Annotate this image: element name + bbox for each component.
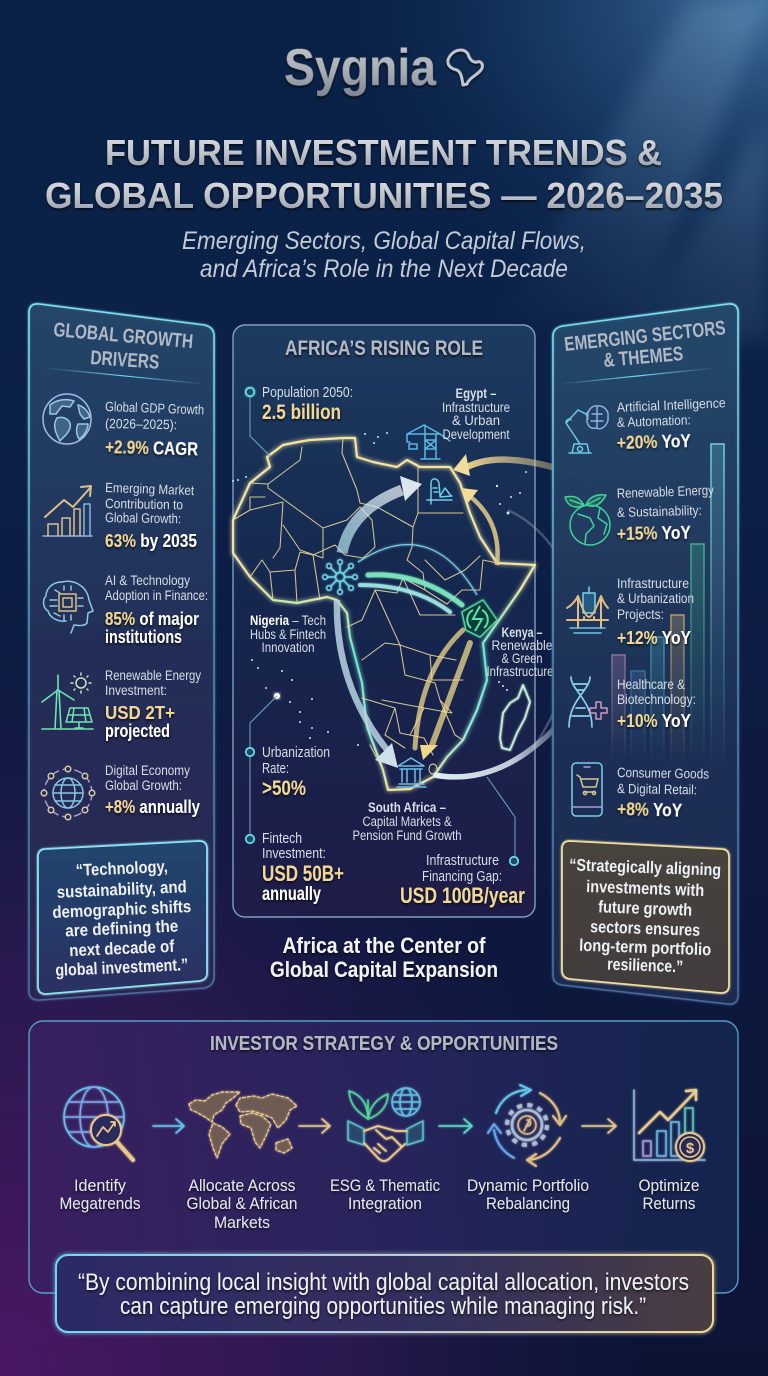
item: renewable energy: Renewable Energy (105, 668, 201, 683)
icon: growth chart with dollar coin: $ (686, 1140, 695, 1157)
step: dynamic rebalancing: Rebalancing (486, 1195, 570, 1213)
icon: kenya green energy (462, 600, 497, 637)
madagascar (500, 685, 530, 750)
item: consumer goods: & Digital Retail: (617, 781, 697, 797)
item: global gdp growth (105, 399, 204, 459)
callout: urbanization and fintech: Urbanization (262, 744, 330, 761)
callout: infrastructure financing gap: USD 100B/year (400, 883, 525, 908)
arrow 3 (439, 1119, 472, 1133)
step: esg integration (330, 1177, 440, 1213)
label: south africa: Capital Markets & (362, 814, 452, 829)
item: artificial intelligence: +20% YoY (617, 431, 691, 453)
item: emerging markets: Contribution to (105, 496, 183, 512)
callout: strategic quote: sectors ensures (590, 917, 700, 940)
heading: africa at the center: Global Capital Expansion (270, 957, 498, 982)
heading: global growth drivers (53, 319, 194, 374)
stars (232, 432, 527, 746)
icon: Africa outline logo (448, 50, 482, 85)
icon: suspension bridge and city (567, 587, 608, 633)
callout: closing quote (56, 1255, 713, 1332)
icon: phone with shopping cart (572, 763, 602, 816)
item: digital economy (105, 763, 200, 817)
icon: dna and medical cross (569, 677, 607, 727)
arrow: nigeria to egypt (342, 476, 422, 553)
item: renewable energy: Investment: (105, 683, 167, 698)
lesotho (429, 764, 437, 774)
step: allocate across markets (186, 1177, 298, 1232)
step: allocate across markets: Markets (214, 1214, 270, 1232)
item: artificial intelligence (616, 395, 726, 453)
step: identify megatrends: Megatrends (60, 1195, 140, 1213)
item: artificial intelligence: Artificial Intelligence (616, 395, 726, 415)
item: artificial intelligence: & Automation: (617, 412, 691, 430)
item: emerging markets: 63% by 2035 (105, 531, 197, 551)
label: nigeria (250, 613, 326, 655)
label: kenya (486, 625, 554, 679)
callout: strategic quote: investments with (586, 877, 704, 900)
panel: global growth drivers (29, 304, 214, 1000)
icon: nigeria tech hub (323, 560, 357, 594)
callout: urbanization and fintech: Fintech (262, 830, 302, 847)
step: esg integration: Integration (348, 1195, 422, 1213)
item: renewable energy: USD 2T+ (105, 703, 175, 723)
step: identify megatrends: Identify (74, 1177, 127, 1195)
item: infrastructure and urbanization: & Urbanization (617, 591, 694, 606)
callout: technology quote: “Technology, (75, 857, 168, 880)
icon: globe with magnifier (64, 1087, 133, 1160)
label: kenya: Renewable (492, 638, 552, 653)
callout: strategic quote: “Strategically aligning (569, 855, 721, 880)
item: emerging markets (105, 480, 197, 551)
item: infrastructure and urbanization: +12% YoY (617, 628, 691, 648)
callout: strategic quote: future growth (598, 897, 692, 920)
label: south africa: South Africa – (368, 800, 446, 815)
callout: population (246, 384, 353, 456)
icon: bar chart with arrow (43, 486, 92, 536)
item: global gdp growth: Global GDP Growth (105, 399, 204, 417)
icon: esg handshake (348, 1088, 423, 1161)
map: africa (233, 438, 535, 790)
icon: crane (407, 425, 450, 459)
arrows: kenya to south africa (415, 630, 470, 760)
step: allocate across markets: Global & African (186, 1195, 298, 1213)
icon: robot arm and brain (566, 406, 608, 453)
callout: technology quote (38, 841, 207, 994)
africa continent outline (233, 438, 535, 790)
item: AI adoption: AI & Technology (105, 573, 190, 588)
arrow: gold arc into egypt from the east (453, 454, 592, 480)
icon: egypt bridge landmark (427, 479, 452, 504)
arrow: white comet (508, 510, 575, 748)
callout: urbanization and fintech: Rate: (262, 760, 289, 777)
brand logo: Sygnia: Sygnia (284, 39, 437, 97)
callout: population: Population 2050: (262, 384, 353, 401)
callout: closing quote: “By combining local insight with global capital allocation, investors (78, 1269, 689, 1296)
label: egypt: & Urban (452, 413, 500, 428)
step: optimize returns: Optimize (638, 1177, 700, 1195)
item: global gdp growth: (2026–2025): (105, 416, 177, 432)
callout: infrastructure financing gap: Infrastructure (426, 852, 499, 869)
panel: emerging sectors and themes (553, 304, 738, 1004)
item: digital economy: +8% annually (105, 797, 200, 817)
callout: strategic quote: long-term portfolio (579, 936, 711, 959)
step: esg integration: ESG & Thematic (330, 1177, 440, 1195)
callout: technology quote: demographic shifts (52, 897, 192, 922)
step: dynamic rebalancing: Dynamic Portfolio (467, 1177, 589, 1195)
title: FUTURE INVESTMENT TRENDS & (105, 132, 662, 173)
panel: investor strategy and opportunities (29, 1021, 738, 1293)
callout: infrastructure financing gap: Financing Gap: (422, 868, 502, 885)
callout: technology quote: are defining the (65, 917, 179, 940)
icon: wind turbine and solar panel (42, 673, 93, 729)
heading: emerging sectors and themes (563, 317, 727, 372)
callout: closing quote: can capture emerging opportunities while managing risk.” (120, 1293, 646, 1320)
arrow: nigeria to south africa (337, 600, 398, 768)
label: nigeria: Innovation (262, 640, 314, 655)
callout: urbanization and fintech: Investment: (262, 845, 326, 862)
step: optimize returns: Returns (642, 1195, 696, 1213)
label: kenya: Kenya – (502, 625, 543, 640)
item: global gdp growth: +2.9% CAGR (105, 437, 198, 459)
icon: AI brain chip (44, 581, 93, 633)
heading: emerging sectors and themes: & THEMES (603, 343, 684, 372)
icon: globe (43, 394, 91, 444)
item: renewable energy and sustainability: & Sustainability: (617, 503, 702, 520)
item: consumer goods: Consumer Goods (617, 765, 709, 782)
item: renewable energy (105, 668, 201, 741)
callout: urbanization and fintech (246, 696, 344, 905)
step: allocate across markets: Allocate Across (188, 1177, 296, 1195)
label: nigeria: Hubs & Fintech (250, 627, 326, 642)
heading: investor strategy: INVESTOR STRATEGY & OPPORTUNITIES (210, 1033, 558, 1055)
callout: technology quote: global investment.” (55, 955, 189, 980)
heading: africa at the center (270, 933, 498, 982)
item: renewable energy and sustainability (617, 483, 714, 544)
arrow: gold arc from horn to egypt (461, 488, 498, 565)
label: egypt (442, 386, 510, 442)
callout: urbanization and fintech: >50% (262, 777, 306, 800)
country borders (233, 438, 497, 770)
step: dynamic rebalancing (467, 1177, 589, 1213)
label: egypt: Infrastructure (442, 400, 510, 415)
item: renewable energy and sustainability: +15% YoY (617, 523, 691, 544)
heading: global growth drivers: DRIVERS (90, 347, 160, 374)
step: identify megatrends (60, 1177, 140, 1213)
heading: global growth drivers: GLOBAL GROWTH (53, 319, 194, 353)
label: kenya: & Green (502, 651, 542, 666)
bar chart: rising bars (612, 444, 724, 769)
item: AI adoption: 85% of major (105, 609, 199, 629)
label: south africa: Pension Fund Growth (352, 828, 462, 843)
subtitle (182, 227, 586, 283)
heading: africa's rising role: AFRICA’S RISING ROLE (285, 337, 483, 360)
panel: africa's rising role (232, 325, 592, 917)
heading: africa at the center: Africa at the Center of (282, 933, 486, 958)
item: emerging markets: Emerging Market (105, 480, 195, 498)
item: digital economy: Digital Economy (105, 763, 190, 778)
item: infrastructure and urbanization: Projects: (617, 607, 664, 622)
item: AI adoption: institutions (105, 627, 182, 647)
item: digital economy: Global Growth: (105, 778, 182, 793)
icon: world map (189, 1092, 297, 1158)
label: nigeria: Nigeria – Tech (250, 613, 326, 628)
callout: strategic quote: resilience.” (607, 955, 684, 976)
item: healthcare: Healthcare & (617, 677, 685, 692)
arrow: thin arc nigeria to kenya (358, 545, 477, 595)
arrow 2 (299, 1119, 330, 1133)
item: healthcare (617, 677, 696, 731)
step labels (60, 1177, 700, 1232)
icon: digital network globe (41, 766, 95, 820)
item: infrastructure and urbanization (617, 576, 694, 648)
label: kenya: Infrastructure (486, 664, 554, 679)
arrow: south africa outward arc (434, 690, 578, 777)
arrow 4 (582, 1119, 616, 1133)
item: healthcare: +10% YoY (617, 711, 691, 731)
label: south africa (352, 800, 462, 843)
title (45, 132, 723, 216)
icon: growth chart with dollar coin (634, 1090, 705, 1161)
item: renewable energy: projected (105, 721, 170, 741)
icon: gear with rebalancing arrows (488, 1085, 566, 1166)
title: GLOBAL OPPORTUNITIES — 2026–2035 (45, 175, 723, 216)
item: renewable energy and sustainability: Renewable Energy (617, 483, 714, 501)
step: optimize returns (638, 1177, 700, 1213)
item: emerging markets: Global Growth: (105, 510, 181, 526)
callout: infrastructure financing gap (400, 777, 525, 908)
callout: urbanization and fintech: USD 50B+ (262, 861, 344, 886)
subtitle: and Africa’s Role in the Next Decade (200, 255, 568, 283)
callout: population: 2.5 billion (262, 401, 341, 424)
arrow: green flows nigeria to kenya (360, 575, 462, 612)
label: egypt: Development (442, 427, 510, 442)
callout: strategic quote (562, 841, 729, 993)
item: infrastructure and urbanization: Infrastructure (617, 576, 689, 591)
item: AI adoption (105, 573, 208, 647)
subtitle: Emerging Sectors, Global Capital Flows, (182, 227, 586, 255)
callout: technology quote: next decade of (69, 937, 175, 960)
callout: technology quote: sustainability, and (56, 877, 187, 902)
icon: earth with leaves (565, 495, 610, 545)
item: consumer goods (617, 765, 709, 821)
label: egypt: Egypt – (456, 386, 497, 401)
icon: south africa bank (397, 758, 426, 787)
item: healthcare: Biotechnology: (617, 692, 696, 707)
callout: urbanization and fintech: annually (262, 884, 321, 905)
arrow 1 (153, 1119, 184, 1133)
item: consumer goods: +8% YoY (617, 799, 682, 821)
item: AI adoption: Adoption in Finance: (105, 588, 208, 603)
